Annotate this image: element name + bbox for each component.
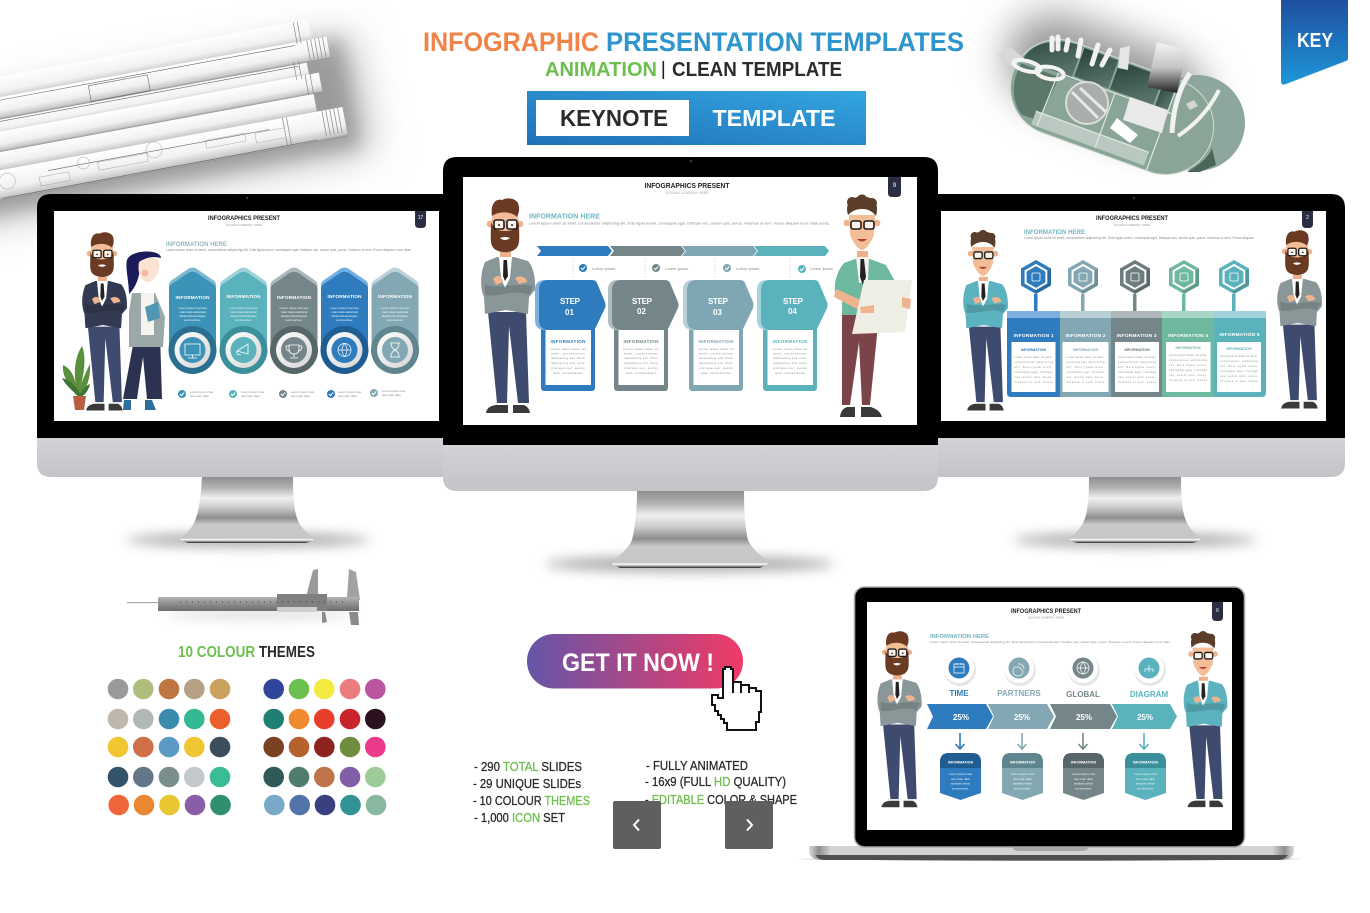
column 5: INFORMATION bbox=[378, 294, 413, 299]
panel 1: INFORMATION 1 bbox=[1014, 333, 1054, 339]
nav button previous bbox=[613, 801, 661, 849]
step 04: adipiscing elit. Duis bbox=[774, 361, 807, 365]
step 01: STEP bbox=[560, 297, 581, 306]
column 5: main data statistical bbox=[382, 310, 408, 314]
column 4: summarizes. bbox=[336, 318, 353, 322]
step 03 bbox=[683, 280, 754, 391]
panel 5: INFORMATION bbox=[1226, 347, 1252, 351]
column 2: Lorem Ipsum has two bbox=[229, 306, 258, 310]
slide slogan: SLOGAN COMPANY HERE bbox=[1028, 616, 1064, 620]
bottom checks bbox=[178, 389, 406, 398]
panel 3 bbox=[1111, 311, 1162, 397]
shield 2: summarizes. bbox=[1014, 786, 1031, 790]
lorem: Lorem ipsum dolor sit amet, consectetuer adipiscing elit. Duis ligula lorem, consequat eget, tristique nec, auctor quis, purus. Vivamus ut sem. Fusce aliquam nunc vitae bbox=[166, 248, 411, 252]
step 01: adipiscing elit. Duis bbox=[552, 356, 585, 360]
step 01: Lorem ipsum dolor sit bbox=[550, 347, 586, 351]
panel 5: Lorem ipsum dolor sit amet, bbox=[1220, 354, 1258, 358]
panel 2: Lorem ipsum dolor sit amet, bbox=[1066, 355, 1105, 359]
shield 3: Lorem Ipsum has bbox=[1072, 772, 1096, 776]
shield 4: summarizes. bbox=[1137, 786, 1154, 790]
shield 4: analysis which bbox=[1136, 782, 1156, 786]
character: curly man teal bbox=[1184, 631, 1227, 807]
shield 2: two main data bbox=[1013, 777, 1032, 781]
nav button next bbox=[725, 801, 773, 849]
info heading: INFORMATION HERE bbox=[529, 214, 600, 220]
laptop bbox=[797, 587, 1304, 861]
column 4: main data statistical bbox=[331, 310, 358, 314]
shield 4: INFORMATION bbox=[1133, 760, 1158, 764]
column 4: INFORMATION bbox=[328, 294, 362, 299]
colour swatches right bbox=[263, 679, 386, 815]
panel 2: consequat eget, tristique bbox=[1066, 370, 1105, 374]
title part 2: PRESENTATION TEMPLATES bbox=[606, 27, 964, 57]
feature list left: - 1,000 ICON SET bbox=[474, 810, 565, 825]
panel 4: nec, auctor quis, purus. bbox=[1169, 373, 1207, 377]
column 5 bbox=[371, 268, 419, 374]
step 02 bbox=[608, 280, 678, 391]
title: INFOGRAPHIC bbox=[423, 27, 599, 57]
slide title: INFOGRAPHICS PRESENT bbox=[644, 183, 730, 190]
shield 2: INFORMATION bbox=[1010, 760, 1035, 764]
step 01 bbox=[535, 280, 606, 391]
column 5: Lorem Ipsum has two bbox=[381, 306, 410, 310]
circle DIAGRAM bbox=[1130, 653, 1168, 699]
slide number tab bbox=[888, 177, 901, 197]
bottom checks: two main data bbox=[241, 394, 260, 398]
character: bearded man bbox=[481, 198, 535, 413]
template box bbox=[527, 91, 866, 145]
shield 3: analysis which bbox=[1074, 782, 1094, 786]
desk tray with stationery bbox=[997, 26, 1245, 188]
panel 5: Vivamus ut sem. Fusce bbox=[1220, 379, 1259, 383]
process arrows: 25% bbox=[1014, 713, 1030, 722]
panel 4: consectetuer adipiscing bbox=[1169, 358, 1208, 362]
step 01: tristique nec, auctor bbox=[551, 366, 585, 370]
column 1: main data statistical bbox=[179, 310, 206, 314]
laptop shadow bbox=[797, 858, 1304, 861]
character: bearded man grey bbox=[877, 631, 922, 807]
shield 1: Lorem Ipsum has bbox=[949, 772, 973, 776]
feature list left bbox=[473, 759, 590, 825]
KEY ribbon: KEY bbox=[1297, 30, 1334, 52]
shield 3: two main data bbox=[1074, 777, 1093, 781]
shield 3: summarizes. bbox=[1075, 786, 1092, 790]
shield 3: INFORMATION bbox=[1071, 760, 1096, 764]
panel 5: consectetuer adipiscing bbox=[1220, 359, 1259, 363]
character: bearded man dark suit bbox=[82, 232, 127, 410]
call to action button bbox=[527, 634, 743, 688]
step 03: STEP bbox=[708, 297, 729, 306]
hexagon icons bbox=[1021, 260, 1249, 311]
feature list left: - 10 COLOUR THEMES bbox=[473, 793, 590, 808]
panel 3: Lorem ipsum dolor sit amet, bbox=[1118, 355, 1156, 359]
feature list left: - 290 TOTAL SLIDES bbox=[474, 759, 582, 774]
slide number tab bbox=[415, 211, 426, 228]
panel 3: consequat eget, tristique bbox=[1118, 370, 1157, 374]
bottom checks: Lorem Ipsum has bbox=[338, 390, 362, 394]
column 3: INFORMATION bbox=[277, 295, 312, 300]
step 02: 02 bbox=[637, 307, 646, 316]
slide title: INFOGRAPHICS PRESENT bbox=[1096, 216, 1168, 222]
column 5: summarizes. bbox=[386, 318, 404, 322]
panel 4 bbox=[1162, 311, 1214, 397]
slide 2 bbox=[941, 211, 1326, 421]
shield 3 bbox=[1063, 753, 1104, 800]
call to action button: GET IT NOW ! bbox=[562, 649, 714, 677]
laptop base bbox=[809, 846, 1294, 860]
column 1: INFORMATION bbox=[176, 295, 210, 300]
panel 1: Lorem ipsum dolor sit amet, bbox=[1014, 355, 1053, 359]
shield 1: INFORMATION bbox=[948, 760, 973, 764]
stand and shadow bbox=[1013, 477, 1257, 547]
slide number tab: 2 bbox=[1306, 215, 1309, 221]
step 03: Lorem ipsum dolor sit bbox=[698, 347, 734, 351]
column 4: Lorem Ipsum has two bbox=[330, 306, 359, 310]
step 04: quis, consectetuer bbox=[775, 371, 805, 375]
panel 3: nec, auctor quis, purus. bbox=[1118, 375, 1156, 379]
column 2: Metamethodologies bbox=[230, 314, 257, 318]
panel 1: consectetuer adipiscing bbox=[1014, 360, 1053, 364]
process arrows bbox=[927, 704, 1177, 729]
slide slogan: SLOGAN COMPANY HERE bbox=[666, 191, 708, 195]
colour themes heading: 10 COLOUR THEMES bbox=[178, 644, 315, 661]
caliper bbox=[127, 569, 360, 625]
panel 3: INFORMATION 3 bbox=[1116, 333, 1157, 339]
process arrows: 25% bbox=[1137, 713, 1153, 722]
slide title: INFOGRAPHICS PRESENT bbox=[1011, 609, 1081, 615]
panel 2: INFORMATION 2 bbox=[1066, 333, 1106, 339]
bottom checks: two main data bbox=[291, 394, 310, 398]
subtitle dark: CLEAN TEMPLATE bbox=[672, 59, 842, 81]
step 04: STEP bbox=[783, 297, 804, 306]
plant bbox=[62, 346, 90, 410]
monitor right bbox=[938, 194, 1345, 547]
column 5: Metamethodologies bbox=[382, 314, 409, 318]
check labels: Lorem Ipsum bbox=[665, 266, 689, 271]
column 3: Lorem Ipsum has two bbox=[280, 306, 309, 310]
column 2: INFORMATION bbox=[226, 294, 261, 299]
panel 1 bbox=[1007, 311, 1060, 397]
bottom checks: Lorem Ipsum has bbox=[190, 390, 214, 394]
stand and shadow bbox=[126, 477, 370, 547]
lorem: Lorem ipsum dolor sit amet, consectetuer adipiscing elit. Duis ligula lorem, consequat eget, tristique nec, auctor quis, purus. Vivamus ut sem. Fusce aliquam nunc vitae purus. bbox=[529, 222, 830, 226]
step 02: tristique nec, auctor bbox=[624, 366, 658, 370]
column 1: Metamethodologies bbox=[179, 314, 206, 318]
check labels: Lorem Ipsum bbox=[736, 266, 760, 271]
step 04: amet, consectetuer bbox=[773, 352, 807, 356]
check labels bbox=[573, 258, 834, 279]
panel 3: Vivamus ut sem. Fusce bbox=[1118, 380, 1157, 384]
circle PARTNERS bbox=[997, 653, 1041, 698]
lorem: Lorem ipsum dolor sit amet, consectetuer adipiscing elit. Duis ligula lorem, consequat eget, tristique nec, auctor quis, purus. Vivamus ut sem. Fusce aliquam bbox=[1024, 236, 1254, 240]
panel 1: INFORMATION bbox=[1021, 348, 1046, 352]
column 2 bbox=[220, 268, 268, 374]
slide number tab bbox=[1212, 602, 1223, 621]
KEY ribbon bbox=[1281, 0, 1348, 85]
panel 5: elit. Duis ligula lorem, bbox=[1220, 364, 1258, 368]
circle PARTNERS: PARTNERS bbox=[997, 689, 1041, 698]
background shadow: soft glow behind rolls and tray bbox=[0, 0, 1217, 231]
step 01: quis, consectetuer bbox=[553, 371, 583, 375]
column 3: summarizes. bbox=[285, 318, 303, 322]
info heading: INFORMATION HERE bbox=[930, 634, 989, 640]
step 01: adipiscing elit. Duis bbox=[552, 361, 585, 365]
template box: TEMPLATE bbox=[712, 105, 836, 131]
character: woman bbox=[123, 251, 165, 410]
panel 2: elit. Duis ligula lorem, bbox=[1066, 365, 1105, 369]
step 04: 04 bbox=[788, 307, 797, 316]
step 03: quis, consectetuer bbox=[701, 371, 731, 375]
panel 5 bbox=[1214, 311, 1266, 397]
step 02: adipiscing elit. Duis bbox=[624, 361, 658, 365]
step 01: amet, consectetuer bbox=[551, 352, 585, 356]
bottom checks: two main data bbox=[338, 394, 357, 398]
step 02: INFORMATION bbox=[624, 339, 659, 344]
column 3: Metamethodologies bbox=[281, 314, 308, 318]
column 1 bbox=[168, 268, 216, 374]
circle DIAGRAM: DIAGRAM bbox=[1130, 690, 1168, 699]
shield 1: two main data bbox=[951, 777, 970, 781]
monitor left bbox=[37, 194, 443, 547]
slide 17 bbox=[54, 211, 439, 421]
column 2: summarizes. bbox=[235, 318, 252, 322]
step 04 bbox=[757, 280, 828, 391]
step 03: INFORMATION bbox=[698, 339, 734, 344]
check labels: Lorem Ipsum bbox=[592, 266, 616, 271]
icon: pixel hand cursor bbox=[712, 667, 761, 730]
down arrows bbox=[956, 733, 1148, 749]
shield 2 bbox=[1002, 753, 1043, 800]
column 2: main data statistical bbox=[230, 310, 257, 314]
stand and shadow bbox=[545, 491, 835, 572]
panel 2: nec, auctor quis, purus. bbox=[1066, 375, 1105, 379]
column 4 bbox=[320, 268, 368, 374]
panel 4: Lorem ipsum dolor sit amet, bbox=[1169, 353, 1207, 357]
panel 4: INFORMATION bbox=[1175, 346, 1201, 350]
info heading: INFORMATION HERE bbox=[1024, 230, 1085, 236]
step 03: amet, consectetuer bbox=[699, 352, 733, 356]
panel 5: consequat eget, tristique bbox=[1220, 369, 1259, 373]
shield 4 bbox=[1125, 753, 1166, 800]
step 03: tristique nec, auctor bbox=[699, 366, 733, 370]
step 03: 03 bbox=[713, 308, 722, 317]
step 02: Lorem ipsum dolor sit bbox=[624, 347, 659, 351]
step 01: 01 bbox=[565, 308, 574, 317]
column 4: Metamethodologies bbox=[331, 314, 358, 318]
circle TIME bbox=[944, 653, 976, 698]
slide slogan: SLOGAN COMPANY HERE bbox=[226, 223, 262, 227]
process arrows: 25% bbox=[1076, 713, 1092, 722]
step 04: INFORMATION bbox=[772, 339, 808, 344]
shield 1: analysis which bbox=[951, 782, 971, 786]
step 02: STEP bbox=[632, 297, 653, 306]
shield 1: summarizes. bbox=[952, 786, 969, 790]
feature list left: - 29 UNIQUE SLIDEs bbox=[473, 776, 581, 791]
panel 1: elit. Duis ligula lorem, bbox=[1014, 365, 1053, 369]
slide slogan: SLOGAN COMPANY HERE bbox=[1114, 223, 1150, 227]
colour swatches left bbox=[108, 679, 231, 815]
bottom checks: Lorem Ipsum has bbox=[382, 389, 406, 393]
panel 3: elit. Duis ligula lorem, bbox=[1118, 365, 1156, 369]
feature list right: - FULLY ANIMATED bbox=[646, 758, 748, 773]
circle TIME: TIME bbox=[949, 689, 969, 698]
column 1: summarizes. bbox=[184, 318, 201, 322]
feature list right: - EDITABLE COLOR & SHAPE bbox=[645, 792, 797, 807]
column 3 bbox=[270, 268, 318, 374]
step 03: adipiscing elit. Duis bbox=[700, 361, 733, 365]
step 04: adipiscing elit. Duis bbox=[774, 356, 807, 360]
circle GLOBAL bbox=[1066, 653, 1100, 699]
feature list right: - 16x9 (FULL HD QUALITY) bbox=[645, 774, 786, 789]
panel 3: consectetuer adipiscing bbox=[1118, 360, 1157, 364]
circle GLOBAL: GLOBAL bbox=[1066, 690, 1100, 699]
bottom checks: Lorem Ipsum has bbox=[291, 390, 315, 394]
lorem: Lorem ipsum dolor sit amet, consectetuer adipiscing elit. Duis ligula lorem, consequat eget, tristique nec, auctor quis, purus. Vivamus ut sem. Fusce aliquam nunc vitae bbox=[930, 640, 1170, 644]
panel 2: Vivamus ut sem. Fusce bbox=[1066, 380, 1105, 384]
monitor center bbox=[443, 157, 938, 572]
step 02: adipiscing elit. Duis bbox=[624, 356, 658, 360]
character: curly man teal bbox=[963, 230, 1008, 410]
panel 2 bbox=[1060, 311, 1111, 397]
panel 2: consectetuer adipiscing bbox=[1066, 360, 1105, 364]
panel 4: consequat eget, tristique bbox=[1169, 368, 1208, 372]
slide number tab: 6 bbox=[1216, 608, 1219, 614]
subtitle green: ANIMATION bbox=[545, 59, 657, 81]
heading block bbox=[423, 27, 964, 145]
top arrows bbox=[537, 246, 829, 256]
step 04: tristique nec, auctor bbox=[773, 366, 807, 370]
bottom checks: two main data bbox=[382, 393, 401, 397]
bottom checks: Lorem Ipsum has bbox=[241, 390, 265, 394]
panel 1: nec, auctor quis, purus. bbox=[1014, 375, 1053, 379]
panel 4: elit. Duis ligula lorem, bbox=[1169, 363, 1207, 367]
step 04: Lorem ipsum dolor sit bbox=[772, 347, 808, 351]
slide title: INFOGRAPHICS PRESENT bbox=[208, 216, 280, 222]
panel 2: INFORMATION bbox=[1073, 348, 1098, 352]
feature list right bbox=[645, 758, 797, 807]
panel 4: Vivamus ut sem. Fusce bbox=[1169, 378, 1208, 382]
step 03: adipiscing elit. Duis bbox=[700, 356, 733, 360]
check labels: Lorem Ipsum bbox=[810, 266, 834, 271]
slide 6 bbox=[867, 602, 1232, 830]
process arrows: 25% bbox=[953, 713, 969, 722]
step 01: INFORMATION bbox=[550, 339, 586, 344]
slide number tab: 17 bbox=[418, 215, 423, 221]
panel 5: INFORMATION 5 bbox=[1220, 332, 1260, 338]
shield 4: Lorem Ipsum has bbox=[1134, 772, 1158, 776]
column 3: main data statistical bbox=[281, 310, 307, 314]
slide 9 bbox=[463, 177, 917, 425]
character: bearded man grey bbox=[1277, 230, 1322, 408]
step 02: amet, consectetuer bbox=[624, 352, 658, 356]
panel 1: Vivamus ut sem. Fusce bbox=[1014, 380, 1053, 384]
shield 2: Lorem Ipsum has bbox=[1011, 772, 1035, 776]
panel 4: INFORMATION 4 bbox=[1168, 333, 1208, 339]
shield 1 bbox=[940, 753, 981, 800]
blueprint rolls bbox=[0, 16, 348, 215]
panel 3: INFORMATION bbox=[1124, 348, 1150, 352]
subtitle bar bbox=[662, 61, 664, 79]
panel 1: consequat eget, tristique bbox=[1014, 370, 1053, 374]
panel 5: nec, auctor quis, purus. bbox=[1220, 374, 1258, 378]
slide number tab: 9 bbox=[893, 183, 897, 189]
info heading: INFORMATION HERE bbox=[166, 242, 227, 248]
slide number tab bbox=[1302, 211, 1313, 228]
shield 2: analysis which bbox=[1013, 782, 1033, 786]
character: man with blueprint bbox=[834, 194, 912, 417]
bottom checks: two main data bbox=[190, 394, 209, 398]
template box: KEYNOTE bbox=[560, 105, 668, 131]
step 02: quis, consectetuer bbox=[626, 371, 656, 375]
column 1: Lorem Ipsum has two bbox=[178, 306, 207, 310]
shield 4: two main data bbox=[1136, 777, 1155, 781]
